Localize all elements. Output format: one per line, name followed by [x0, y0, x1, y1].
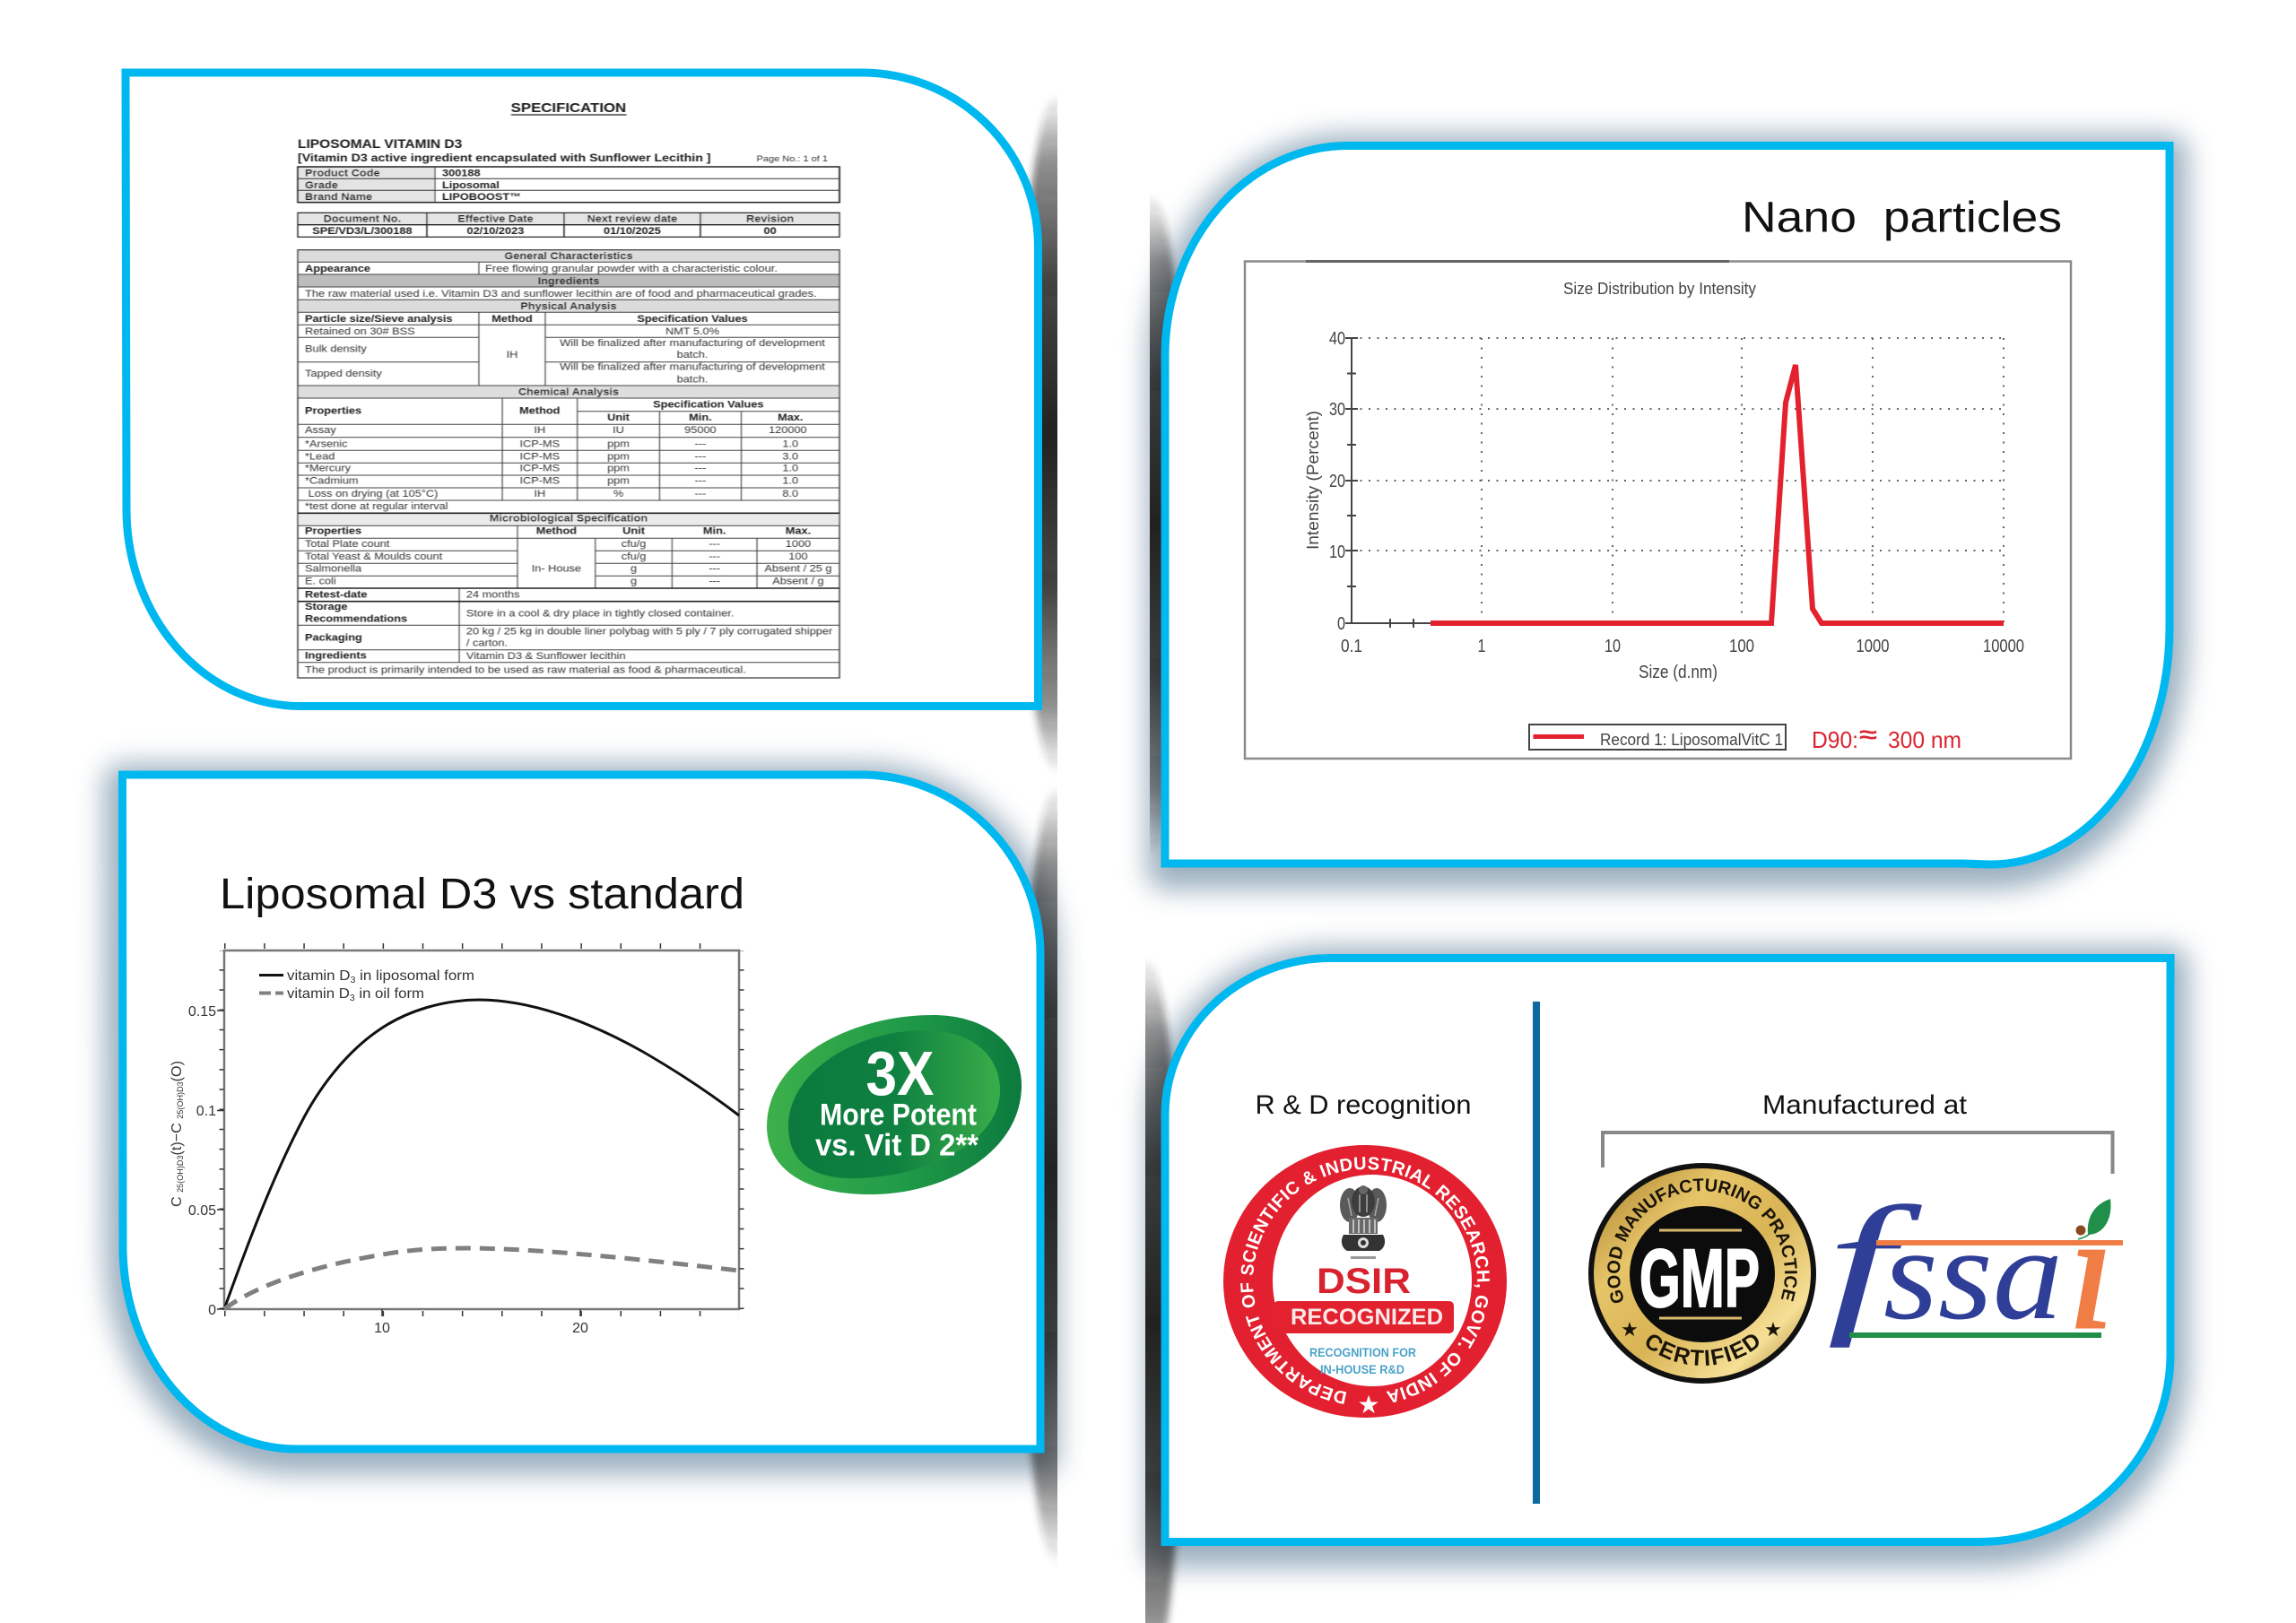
- size distribution chart: 0: [1337, 614, 1345, 634]
- specification document table: *Lead: [305, 450, 335, 462]
- specification document table: Microbiological Specification: [490, 513, 648, 524]
- specification document table: IH: [507, 349, 517, 360]
- size distribution chart: [1245, 262, 2071, 759]
- panel: liposomal vs standard: [122, 775, 1040, 1449]
- specification document table: ICP-MS: [519, 463, 560, 473]
- line chart: vitamin D3 liposomal vs oil: vitamin D: [287, 986, 347, 1002]
- size distribution chart: 1000: [1857, 637, 1889, 656]
- divider bar: [1533, 1002, 1540, 1504]
- specification document table: Page No.: 1 of 1: [757, 155, 828, 164]
- specification document table: [298, 101, 839, 678]
- heading: Liposomal D3 vs standard: Liposomal D3 vs standard: [220, 871, 744, 918]
- icon: fssai logo: [1827, 1176, 2123, 1364]
- specification document table: 24 months: [466, 588, 520, 600]
- specification document table: LIPOSOMAL VITAMIN D3: [298, 137, 462, 152]
- specification document table: ---: [709, 538, 720, 550]
- size distribution chart: 30: [1329, 400, 1345, 420]
- specification document table: Revision: [746, 213, 794, 224]
- line chart: vitamin D3 liposomal vs oil: 0.05: [188, 1203, 216, 1219]
- specification document table: ---: [695, 438, 706, 449]
- badge: 3X more potent: 3X: [866, 1038, 935, 1108]
- specification document table: Tapped density: [305, 368, 382, 379]
- specification document table: 02/10/2023: [466, 225, 525, 237]
- specification document table: Min.: [703, 525, 726, 536]
- size distribution chart: Size Distribution by Intensity: [1563, 280, 1756, 298]
- specification document table: LIPOBOOST™: [442, 191, 521, 203]
- specification document table: Particle size/Sieve analysis: [305, 313, 453, 325]
- size distribution chart: 40: [1329, 329, 1345, 349]
- specification document table: 1000: [786, 538, 812, 550]
- size distribution chart: 0.1: [1341, 637, 1362, 656]
- specification document table: 20 kg / 25 kg in double liner polybag with 5 ply / 7 ply corrugated shipper: [466, 626, 832, 637]
- line chart: vitamin D3 liposomal vs oil: 25(OH)D3: [176, 1155, 185, 1193]
- specification document table: Max.: [786, 525, 811, 536]
- line chart: vitamin D3 liposomal vs oil: 25(OH)D3: [176, 1081, 185, 1119]
- specification document table: Vitamin D3 & Sunflower lecithin: [466, 650, 626, 662]
- specification document table: cfu/g: [622, 551, 646, 562]
- specification document table: Appearance: [305, 263, 370, 274]
- specification document table: Bulk density: [305, 343, 367, 354]
- specification document table: Grade: [305, 179, 338, 191]
- specification document table: Liposomal: [442, 179, 500, 191]
- specification document table: g: [631, 563, 637, 574]
- heading: Manufactured at: Manufactured at: [1762, 1090, 1968, 1120]
- line chart: vitamin D3 liposomal vs oil: (t)−C: [170, 1119, 185, 1155]
- specification document table: Physical Analysis: [520, 300, 617, 312]
- panel: specification sheet: [126, 73, 1039, 706]
- icon: GMP certified seal: GOOD MANUFACTURING PRACTICE: [1607, 1178, 1797, 1304]
- specification document table: 8.0: [782, 488, 799, 499]
- specification document table: 1.0: [782, 474, 799, 486]
- specification document table: Retained on 30# BSS: [305, 325, 415, 337]
- specification document table: SPE/VD3/L/300188: [312, 225, 413, 237]
- specification document table: IH: [534, 488, 545, 499]
- icon: fssai logo: f: [1827, 1176, 1923, 1349]
- specification document table: Absent / g: [772, 576, 824, 586]
- line chart: vitamin D3 liposomal vs oil: 0.15: [188, 1004, 216, 1020]
- line chart: vitamin D3 liposomal vs oil: (O): [170, 1061, 185, 1081]
- specification document table: Method: [491, 313, 533, 325]
- specification document table: *Arsenic: [305, 438, 348, 449]
- panel: nano particles: [1165, 145, 2170, 864]
- heading: Nano particles: Nano particles: [1742, 194, 2062, 242]
- icon: GMP certified seal: ★: [1764, 1318, 1782, 1341]
- specification document table: ICP-MS: [519, 438, 560, 449]
- specification document table: Method: [536, 525, 577, 536]
- specification document table: cfu/g: [622, 538, 646, 550]
- specification document table: Ingredients: [305, 649, 367, 661]
- specification document table: Total Yeast & Moulds count: [305, 551, 443, 562]
- specification document table: Brand Name: [305, 191, 373, 203]
- icon: fssai logo: ssa: [1883, 1201, 2063, 1348]
- specification document table: Free flowing granular powder with a characteristic colour.: [485, 263, 778, 274]
- line chart: vitamin D3 liposomal vs oil: in liposomal form: [355, 968, 474, 984]
- specification document table: Recommendations: [305, 613, 408, 624]
- specification document table: Product Code: [305, 168, 380, 178]
- size distribution chart: Record 1: LiposomalVitC 1: [1600, 731, 1783, 749]
- size distribution chart: 300 nm: [1888, 726, 1961, 753]
- specification document table: Assay: [305, 424, 336, 436]
- specification document table: Effective Date: [457, 213, 534, 224]
- specification document table: Salmonella: [305, 563, 362, 574]
- specification document table: 01/10/2025: [604, 225, 661, 237]
- icon: fssai logo: ı: [2068, 1180, 2114, 1364]
- specification document table: In- House: [532, 562, 581, 574]
- specification document table: Specification Values: [637, 313, 748, 325]
- specification document table: IU: [613, 424, 624, 436]
- bracket: [1603, 1133, 2113, 1174]
- specification document table: ICP-MS: [519, 474, 560, 486]
- specification document table: 120000: [769, 424, 807, 436]
- specification document table: Ingredients: [538, 275, 600, 287]
- specification document table: ---: [695, 450, 706, 462]
- specification document table: 00: [764, 225, 777, 237]
- specification document table: Specification Values: [653, 399, 764, 410]
- specification document table: ---: [695, 474, 706, 486]
- specification document table: Storage: [305, 601, 348, 612]
- specification document table: Unit: [607, 412, 630, 423]
- size distribution chart: 1: [1478, 637, 1485, 656]
- specification document table: Min.: [689, 412, 712, 423]
- specification document table: g: [631, 576, 637, 586]
- size distribution chart: 10000: [1983, 637, 2024, 656]
- icon: DSIR seal: ★: [1357, 1391, 1380, 1419]
- line chart: vitamin D3 liposomal vs oil: in oil form: [355, 986, 424, 1002]
- line chart: vitamin D3 liposomal vs oil: 10: [374, 1321, 390, 1336]
- specification document table: 3.0: [782, 450, 799, 462]
- specification document table: ppm: [607, 450, 630, 462]
- line chart: vitamin D3 liposomal vs oil: vitamin D: [287, 968, 347, 984]
- line chart: vitamin D3 liposomal vs oil: 3: [351, 976, 356, 985]
- size distribution chart: 20: [1329, 472, 1345, 491]
- specification document table: Loss on drying (at 105°C): [309, 488, 438, 499]
- heading: R & D recognition: R & D recognition: [1256, 1090, 1471, 1120]
- icon: GMP certified seal: CERTIFIED: [1647, 1334, 1759, 1366]
- size distribution chart: 10: [1605, 637, 1621, 656]
- icon: DSIR seal: DSIR: [1317, 1262, 1411, 1301]
- size distribution chart: 100: [1729, 637, 1754, 656]
- specification document table: Max.: [778, 412, 803, 423]
- specification document table: *Cadmium: [305, 474, 359, 486]
- specification document table: Properties: [305, 525, 361, 536]
- specification document table: Retest-date: [305, 588, 368, 600]
- specification document table: ---: [695, 488, 706, 499]
- specification document table: 95000: [684, 424, 717, 436]
- soft panel shadows: [122, 152, 2170, 1549]
- specification document table: Method: [519, 405, 560, 416]
- specification document table: %: [613, 488, 624, 499]
- specification document table: Total Plate count: [305, 538, 390, 550]
- icon: DSIR seal: RECOGNIZED: [1291, 1305, 1443, 1330]
- icon: national emblem: [1340, 1185, 1387, 1259]
- badge: 3X more potent: More Potent: [820, 1098, 977, 1133]
- line chart: vitamin D3 liposomal vs oil: 20: [572, 1321, 588, 1336]
- specification document table: Chemical Analysis: [518, 386, 619, 397]
- specification document table: Store in a cool & dry place in tightly closed container.: [466, 607, 734, 619]
- specification document table: 100: [788, 551, 808, 562]
- specification document table: Properties: [305, 405, 361, 416]
- icon: DSIR seal: IN-HOUSE R&D: [1320, 1362, 1405, 1376]
- specification document table: ---: [709, 576, 720, 586]
- specification document table: 1.0: [782, 463, 799, 473]
- specification document table: *test done at regular interval: [305, 500, 448, 512]
- specification document table: ppm: [607, 438, 630, 449]
- specification document table: batch.: [677, 349, 708, 360]
- specification document table: ICP-MS: [519, 450, 560, 462]
- line chart: vitamin D3 liposomal vs oil: 3: [350, 994, 355, 1003]
- line chart: vitamin D3 liposomal vs oil: C: [170, 1196, 185, 1207]
- size distribution chart: Intensity (Percent): [1304, 411, 1322, 550]
- specification document table: ---: [695, 463, 706, 473]
- specification document table: ---: [709, 551, 720, 562]
- specification document table: IH: [534, 424, 545, 436]
- panel: recognition and certifications: [1161, 954, 2174, 1546]
- line chart: vitamin D3 liposomal vs oil: 0.1: [196, 1104, 216, 1119]
- icon: GMP certified seal: ★: [1621, 1318, 1639, 1341]
- specification document table: / carton.: [466, 637, 508, 648]
- specification document table: 300188: [442, 168, 481, 178]
- specification document table: SPECIFICATION: [511, 101, 626, 116]
- size distribution chart: Size (d.nm): [1639, 663, 1718, 682]
- size distribution chart: D90:: [1812, 726, 1858, 753]
- icon: GMP certified seal: GMP: [1639, 1233, 1760, 1324]
- specification document table: Absent / 25 g: [764, 563, 832, 574]
- line chart: vitamin D3 liposomal vs oil: [170, 946, 742, 1336]
- specification document table: General Characteristics: [504, 250, 633, 262]
- icon: DSIR seal: DEPARTMENT OF SCIENTIFIC & INDUSTRIAL RESEARCH, GOVT. OF INDIA: [1240, 1157, 1490, 1404]
- specification document table: ppm: [607, 474, 630, 486]
- specification document table: Will be finalized after manufacturing of development: [560, 337, 826, 349]
- specification document table: NMT 5.0%: [665, 325, 719, 337]
- specification document table: 1.0: [782, 438, 799, 449]
- specification document table: ---: [709, 563, 720, 574]
- specification document table: *Mercury: [305, 463, 351, 473]
- icon: GMP certified seal: [1588, 1163, 1816, 1384]
- specification document table: Next review date: [587, 213, 678, 224]
- line chart: vitamin D3 liposomal vs oil: 0: [208, 1303, 216, 1318]
- specification document table: The raw material used i.e. Vitamin D3 and sunflower lecithin are of food and pharmaceutical grades.: [305, 288, 817, 299]
- specification document table: [Vitamin D3 active ingredient encapsulated with Sunflower Lecithin ]: [298, 152, 711, 164]
- dark side shadow strips: [1020, 93, 1187, 1623]
- badge: 3X more potent: [767, 1015, 1022, 1194]
- icon: DSIR seal: RECOGNITION FOR: [1309, 1345, 1416, 1359]
- badge: 3X more potent: vs. Vit D 2**: [815, 1129, 979, 1163]
- specification document table: Unit: [622, 525, 645, 536]
- size distribution chart: ≈: [1859, 721, 1877, 748]
- specification document table: E. coli: [305, 576, 336, 586]
- specification document table: Document No.: [324, 213, 401, 224]
- specification document table: Will be finalized after manufacturing of development: [560, 361, 826, 372]
- specification document table: batch.: [677, 374, 708, 385]
- specification document table: ppm: [607, 463, 630, 473]
- size distribution chart: 10: [1329, 542, 1345, 562]
- specification document table: Packaging: [305, 631, 362, 643]
- specification document table: The product is primarily intended to be used as raw material as food & pharmaceutical.: [305, 664, 746, 675]
